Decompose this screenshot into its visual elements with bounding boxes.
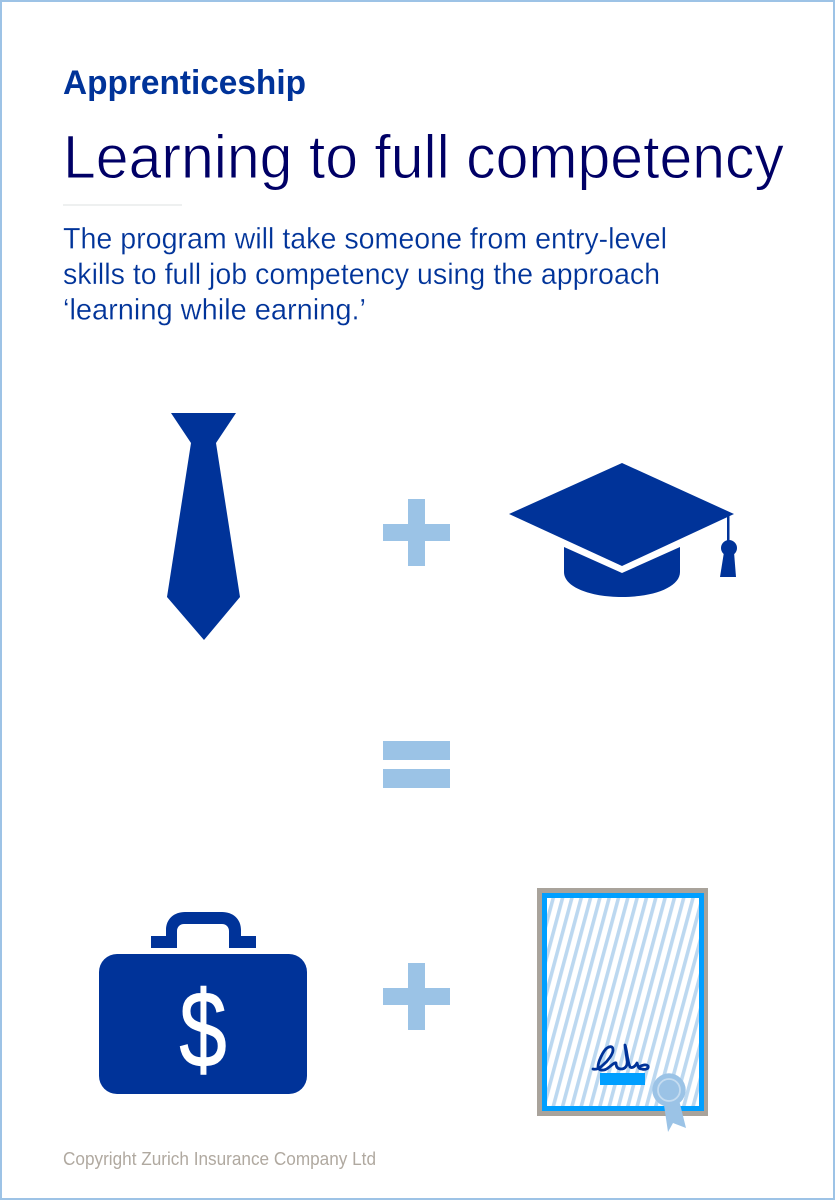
copyright: Copyright Zurich Insurance Company Ltd (63, 1149, 376, 1169)
icon: necktie (167, 413, 240, 640)
signature (593, 1045, 648, 1070)
eyebrow heading: Apprenticeship (63, 64, 306, 102)
intro text: The program will take someone from entry-level (63, 222, 667, 256)
icon: briefcase with dollar: $ (179, 969, 227, 1090)
icon: certificate (537, 888, 708, 1132)
intro text: skills to full job competency using the approach (63, 258, 660, 291)
icon: equals sign (383, 741, 450, 788)
signature line (600, 1073, 645, 1085)
seal ribbon (664, 1100, 686, 1132)
icon: graduation cap (509, 463, 737, 597)
intro text (63, 222, 667, 326)
icon: briefcase with dollar (99, 912, 307, 1094)
intro text: ‘learning while earning.’ (63, 294, 366, 326)
icon: plus sign top (383, 499, 450, 566)
title: Learning to full competency (63, 123, 784, 191)
divider (63, 204, 182, 206)
icon: plus sign bottom (383, 963, 450, 1030)
